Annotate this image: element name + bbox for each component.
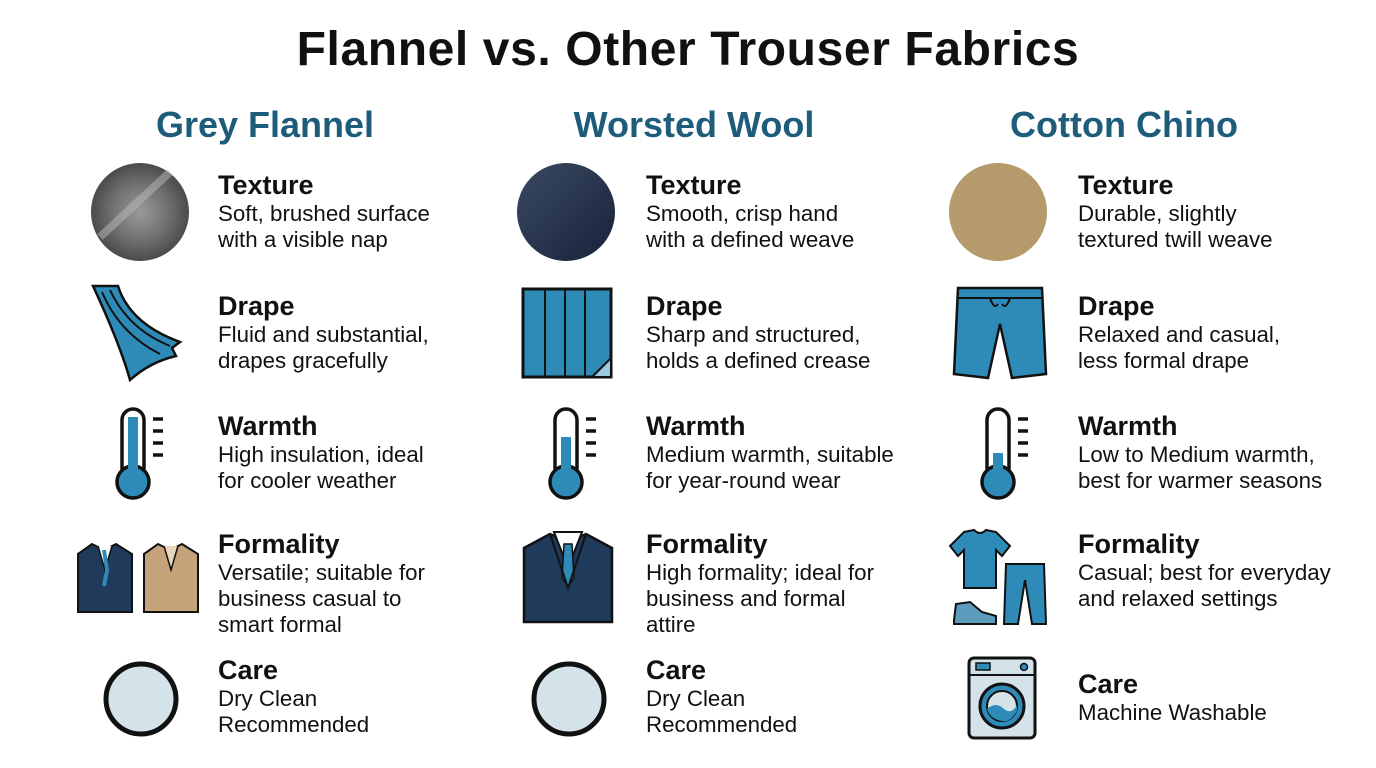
icon: two blazers	[77, 542, 199, 613]
text: flannel drape	[218, 291, 429, 373]
text: flannel care: Recommended	[218, 712, 369, 737]
text: flannel formality: business casual to	[218, 586, 401, 611]
icon: shorts drape	[952, 286, 1048, 380]
text: chino texture: textured twill weave	[1078, 227, 1273, 252]
text: flannel care	[218, 655, 369, 737]
text: chino texture: Durable, slightly	[1078, 201, 1237, 226]
text: worsted care	[646, 655, 797, 737]
text: flannel drape: Drape	[218, 291, 295, 321]
text: worsted formality: business and formal	[646, 586, 846, 611]
text: flannel warmth	[218, 411, 424, 493]
icon: casual outfit	[948, 528, 1048, 625]
icon: thermometer low	[980, 407, 1028, 500]
text: chino drape	[1078, 291, 1280, 373]
text: worsted formality	[646, 529, 874, 637]
text: chino care	[1078, 669, 1267, 725]
text: flannel texture: Soft, brushed surface	[218, 201, 430, 226]
text: chino drape: Drape	[1078, 291, 1155, 321]
text: flannel warmth: High insulation, ideal	[218, 442, 424, 467]
icon: worsted texture	[517, 163, 615, 261]
text: worsted formality: attire	[646, 612, 696, 637]
text: chino formality: Formality	[1078, 529, 1200, 559]
text: flannel care: Care	[218, 655, 278, 685]
text: worsted texture: Smooth, crisp hand	[646, 201, 838, 226]
icon: circle care	[104, 662, 178, 736]
text: chino warmth: best for warmer seasons	[1078, 468, 1322, 493]
text: worsted drape: holds a defined crease	[646, 348, 870, 373]
text: worsted formality: High formality; ideal for	[646, 560, 874, 585]
text: flannel texture: with a visible nap	[218, 227, 388, 252]
text: worsted drape: Sharp and structured,	[646, 322, 860, 347]
text: worsted formality: Formality	[646, 529, 768, 559]
text: chino drape: less formal drape	[1078, 348, 1249, 373]
text: chino texture: Texture	[1078, 170, 1174, 200]
text: worsted care: Recommended	[646, 712, 797, 737]
text: flannel formality: smart formal	[218, 612, 342, 637]
text: flannel formality	[218, 529, 425, 637]
text: worsted warmth: Warmth	[646, 411, 746, 441]
icon: suit	[522, 531, 614, 624]
text: chino formality: Casual; best for everyday	[1078, 560, 1331, 585]
text: flannel formality: Versatile; suitable for	[218, 560, 425, 585]
icon: flannel drape	[91, 284, 182, 382]
text: worsted texture: with a defined weave	[646, 227, 854, 252]
text: chino texture	[1078, 170, 1273, 252]
text: chino formality: and relaxed settings	[1078, 586, 1278, 611]
text: flannel drape: Fluid and substantial,	[218, 322, 429, 347]
text: worsted texture	[646, 170, 854, 252]
column heading: worsted wool: Worsted Wool	[574, 104, 814, 145]
icon: circle care	[532, 662, 606, 736]
text: worsted warmth: for year-round wear	[646, 468, 841, 493]
text: chino care: Machine Washable	[1078, 700, 1267, 725]
text: worsted drape: Drape	[646, 291, 723, 321]
text: chino warmth	[1078, 411, 1322, 493]
text: worsted care: Dry Clean	[646, 686, 745, 711]
icon: worsted drape	[522, 288, 612, 378]
text: chino formality	[1078, 529, 1331, 611]
text: chino care: Care	[1078, 669, 1138, 699]
text: flannel formality: Formality	[218, 529, 340, 559]
text: chino drape: Relaxed and casual,	[1078, 322, 1280, 347]
column heading: grey flannel: Grey Flannel	[156, 104, 374, 145]
text: flannel warmth: Warmth	[218, 411, 318, 441]
text: worsted warmth: Medium warmth, suitable	[646, 442, 894, 467]
text: worsted drape	[646, 291, 870, 373]
text: worsted care: Care	[646, 655, 706, 685]
column heading: cotton chino: Cotton Chino	[1010, 104, 1238, 145]
icon: thermometer high	[115, 407, 163, 500]
text: flannel warmth: for cooler weather	[218, 468, 396, 493]
text: chino warmth: Low to Medium warmth,	[1078, 442, 1315, 467]
text: flannel drape: drapes gracefully	[218, 348, 388, 373]
icon: thermometer medium	[548, 407, 596, 500]
text: chino warmth: Warmth	[1078, 411, 1178, 441]
title: Flannel vs. Other Trouser Fabrics	[297, 23, 1079, 76]
text: flannel texture: Texture	[218, 170, 314, 200]
text: flannel texture	[218, 170, 430, 252]
icon: chino texture	[949, 163, 1047, 261]
icon: flannel texture	[91, 163, 189, 261]
text: worsted warmth	[646, 411, 894, 493]
text: flannel care: Dry Clean	[218, 686, 317, 711]
text: worsted texture: Texture	[646, 170, 742, 200]
icon: washing machine	[968, 656, 1036, 740]
